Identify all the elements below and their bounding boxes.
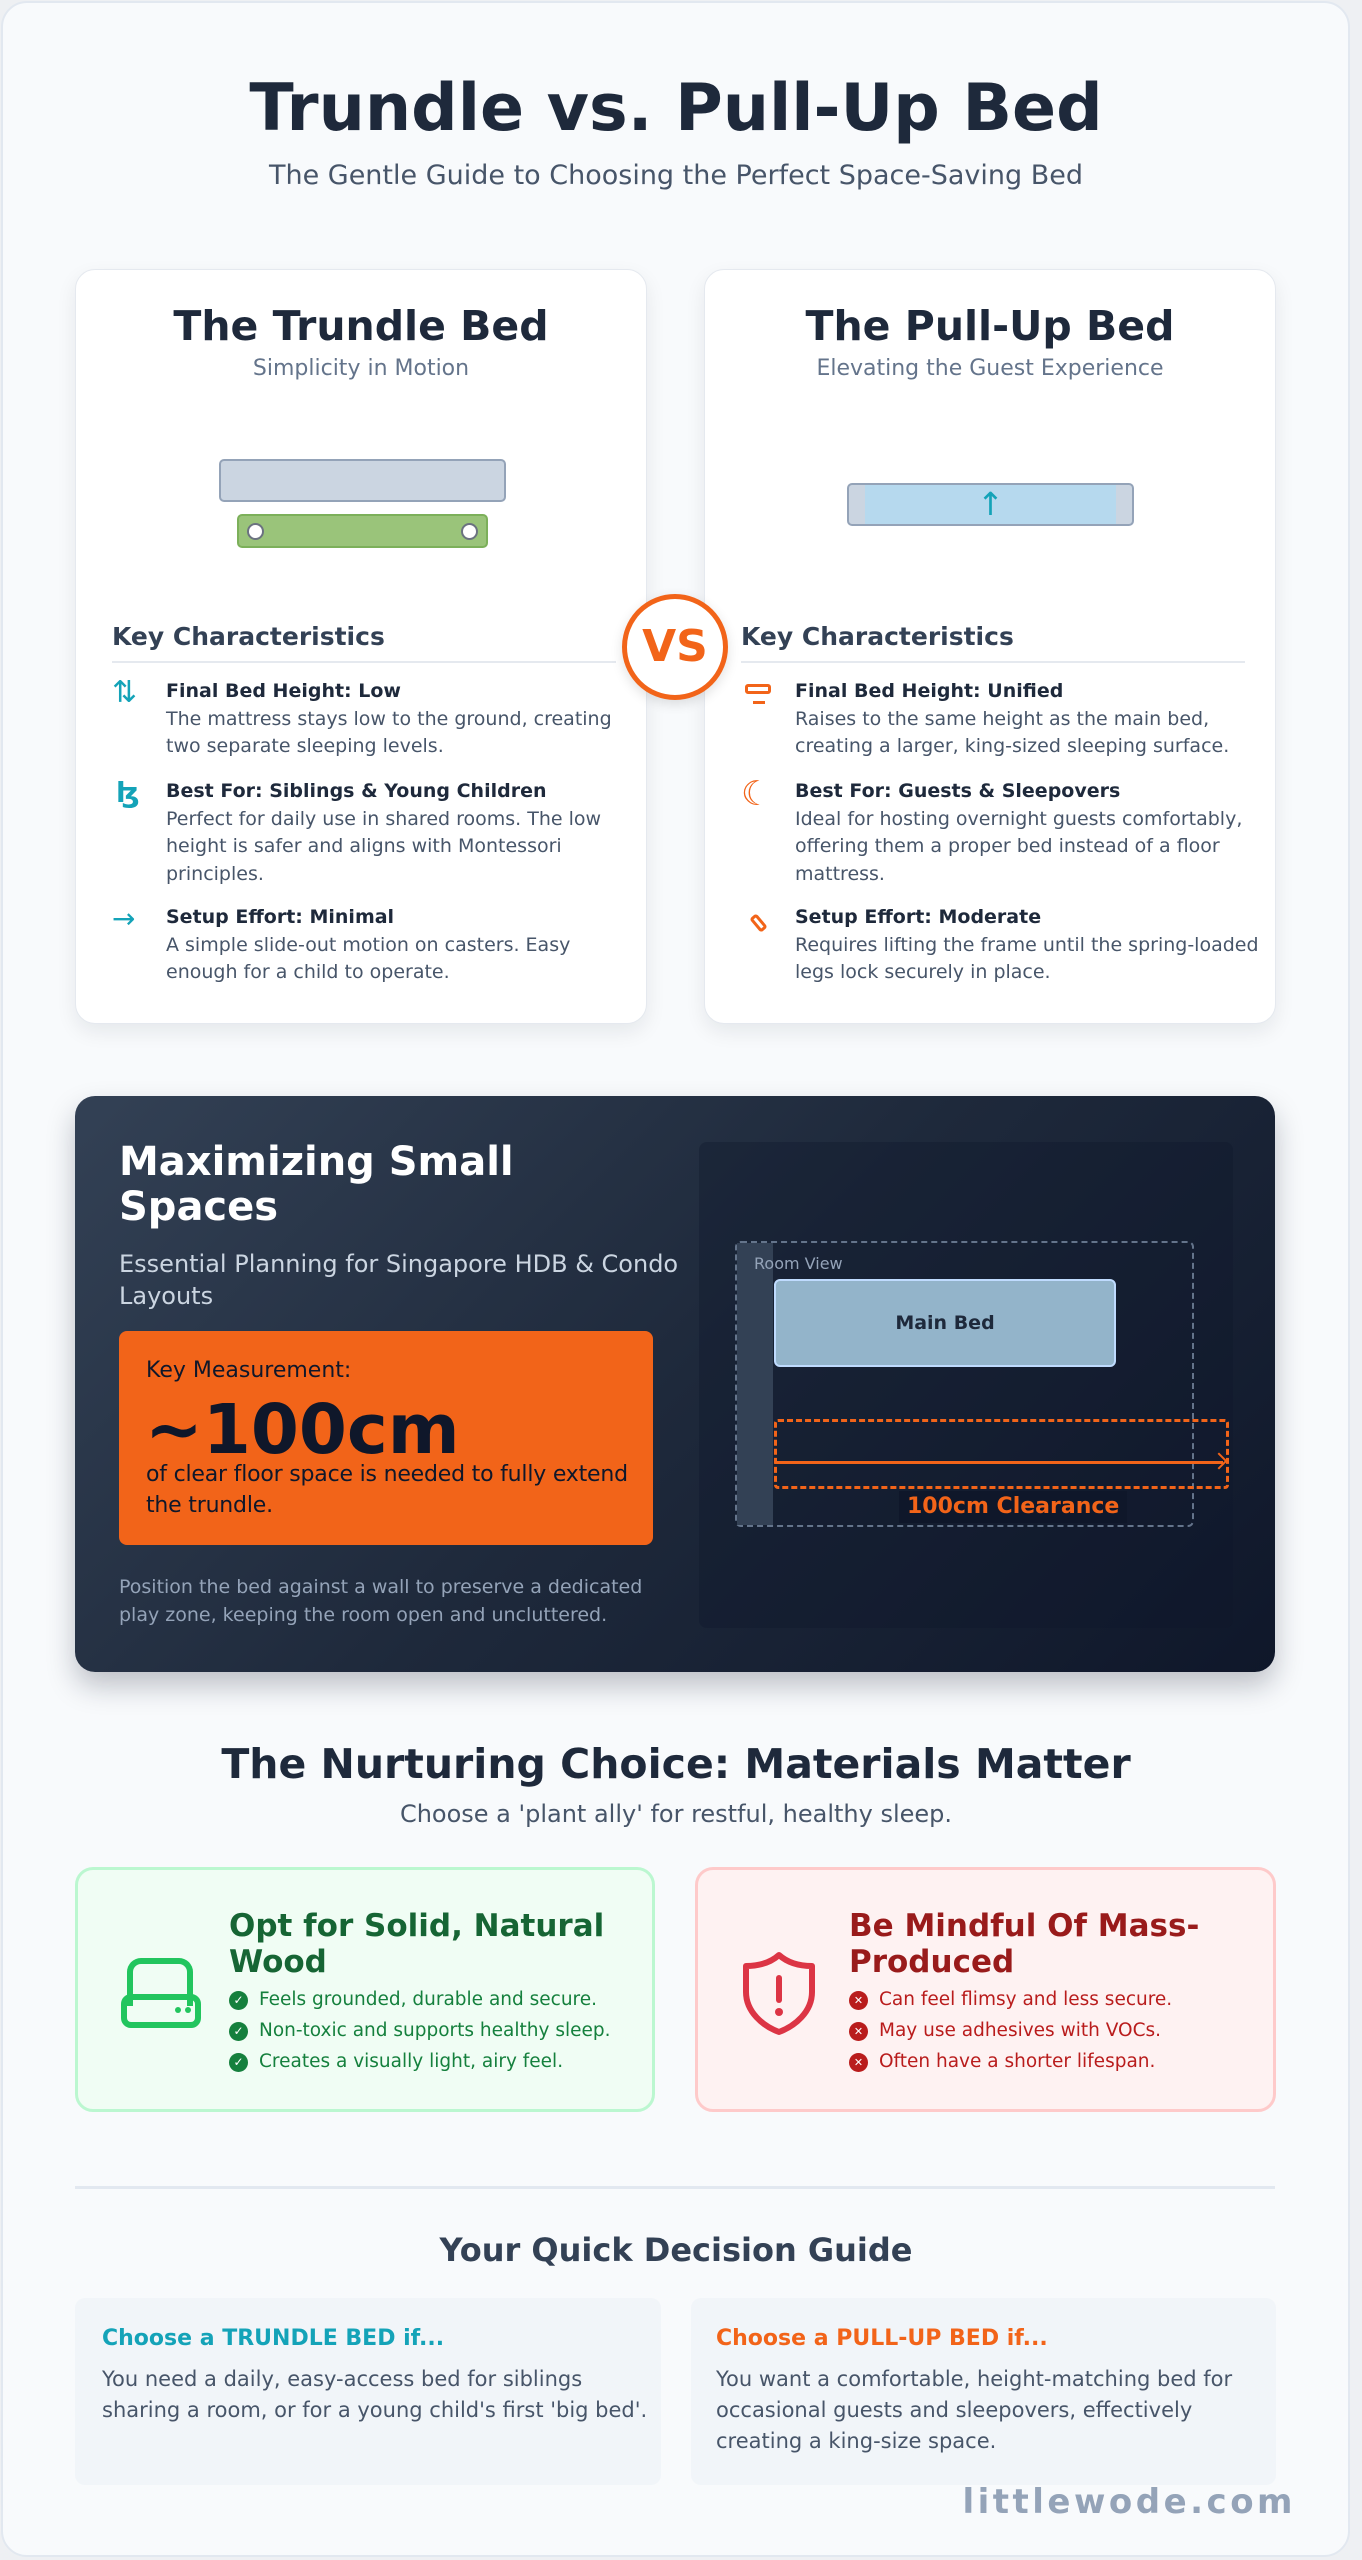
panel: trundle bed [75, 269, 647, 1024]
item: setup [750, 906, 1259, 983]
heading: Opt for Solid, Natural Wood [229, 1908, 604, 1980]
heading: Choose a TRUNDLE BED if... [102, 2326, 444, 2351]
heading: materials: The Nurturing Choice: Materials Matter [221, 1740, 1131, 1788]
callout: key measurement: ~100cm [145, 1390, 460, 1470]
panel: maximizing small spaces [75, 1096, 1275, 1672]
heading: Choose a PULL-UP BED if... [716, 2326, 1048, 2351]
list: benefits: Feels grounded, durable and secure. [259, 1989, 597, 2010]
panel: trundle bed: Setup Effort: Minimal [166, 906, 394, 928]
panel: trundle bed: Perfect for daily use in shared rooms. The low height is safer and aligns with Montessori principles. [166, 808, 601, 884]
list: drawbacks [849, 1989, 1172, 2072]
list: drawbacks: Can feel flimsy and less secure. [879, 1989, 1172, 2010]
panel: solid wood [75, 1867, 655, 2112]
panel: pull-up bed: Requires lifting the frame until the spring-loaded legs lock securely in place. [795, 934, 1259, 983]
subtitle: The Gentle Guide to Choosing the Perfect Space-Saving Bed [269, 160, 1083, 191]
icon: moon: ☾ [741, 774, 771, 814]
panel: mass-produced [695, 1867, 1276, 2112]
list: benefits [229, 1989, 610, 2072]
heading: key characteristics: Key Characteristics [112, 622, 385, 651]
panel: pull-up bed: Raises to the same height as the main bed, creating a larger, king-sized sleeping surface. [795, 708, 1229, 757]
list: benefits: ✓ [233, 1993, 244, 2007]
callout: key measurement [119, 1331, 653, 1545]
heading: Maximizing Small Spaces [119, 1139, 514, 1230]
heading: Be Mindful Of Mass-Produced [849, 1908, 1199, 1980]
list: benefits: ✓ [233, 2024, 244, 2038]
text: You want a comfortable, height-matching bed for occasional guests and sleepovers, effectively creating a king-size space. [716, 2367, 1232, 2453]
icon: level [745, 684, 771, 704]
heading: key characteristics [741, 622, 1245, 663]
subheading: Essential Planning for Singapore HDB & Condo Layouts [119, 1250, 678, 1310]
diagram: room view [699, 1142, 1233, 1628]
icon: wood block [121, 1958, 201, 2028]
panel: pull-up bed: Ideal for hosting overnight guests comfortably, offering them a proper bed instead of a floor mattress. [795, 808, 1242, 884]
panel: trundle bed: A simple slide-out motion on casters. Easy enough for a child to operate. [166, 934, 570, 983]
arrow: clearance [775, 1461, 1223, 1464]
heading: key characteristics: Key Characteristics [741, 622, 1014, 651]
wall [737, 1243, 773, 1525]
title: Trundle vs. Pull-Up Bed [249, 71, 1103, 146]
panel: pull-up bed: Setup Effort: Moderate [795, 906, 1041, 928]
subheading: materials: Choose a 'plant ally' for restful, healthy sleep. [400, 1800, 952, 1828]
list: benefits: ✓ [233, 2055, 244, 2069]
text: You need a daily, easy-access bed for siblings sharing a room, or for a young child's first 'big bed'. [102, 2367, 647, 2422]
main bed: Main Bed [895, 1312, 995, 1334]
panel: trundle bed: Final Bed Height: Low [166, 680, 401, 702]
subheading: Elevating the Guest Experience [816, 356, 1164, 381]
list: drawbacks: ✕ [854, 2025, 863, 2038]
illustration: pull-up bed: ↑ [977, 485, 1004, 523]
heading: key characteristics [112, 622, 616, 663]
watermark: littlewode.com [962, 2482, 1296, 2522]
callout: key measurement: of clear floor space is needed to fully extend the trundle. [146, 1462, 628, 1518]
icon: arrows up down: ⇅ [112, 675, 137, 710]
label: room view: Room View [754, 1254, 843, 1273]
clearance zone [774, 1419, 1229, 1489]
list: drawbacks: May use adhesives with VOCs. [879, 2020, 1161, 2041]
room outline [735, 1241, 1194, 1527]
badge: VS: VS [642, 621, 708, 672]
list: benefits: Creates a visually light, airy feel. [259, 2051, 563, 2072]
item: height [745, 680, 1229, 757]
heading: decision guide: Your Quick Decision Guide [439, 2231, 912, 2269]
illustration: pull-up bed [847, 483, 1134, 526]
icon: child: ɮ [116, 776, 140, 809]
item: height [112, 675, 612, 757]
subheading: Simplicity in Motion [253, 356, 469, 381]
panel: pull-up bed: Final Bed Height: Unified [795, 680, 1063, 702]
panel: pull-up bed: Best For: Guests & Sleepovers [795, 780, 1120, 802]
item: best for [741, 774, 1242, 884]
panel: trundle bed: Best For: Siblings & Young Children [166, 780, 546, 802]
list: benefits: Non-toxic and supports healthy sleep. [259, 2020, 610, 2041]
list: drawbacks: Often have a shorter lifespan. [879, 2051, 1155, 2072]
icon: arrow right: → [112, 902, 135, 935]
panel: pull-up bed [704, 269, 1276, 1024]
panel: choose pull-up [691, 2298, 1276, 2485]
icon: lever [749, 913, 768, 933]
badge: VS [622, 594, 728, 700]
heading: The Trundle Bed [173, 302, 549, 350]
label: clearance: 100cm Clearance [907, 1494, 1119, 1519]
icon: warning shield [743, 1952, 815, 2035]
list: drawbacks: ✕ [854, 2056, 863, 2069]
heading: The Pull-Up Bed [806, 302, 1174, 350]
main bed [774, 1279, 1116, 1367]
callout: key measurement: Key Measurement: [146, 1358, 351, 1383]
panel: choose trundle [75, 2298, 661, 2485]
panel: trundle bed: The mattress stays low to the ground, creating two separate sleeping levels. [166, 708, 612, 757]
text: tip: Position the bed against a wall to preserve a dedicated play zone, keeping the room open and uncluttered. [119, 1576, 642, 1626]
list: drawbacks: ✕ [854, 1994, 863, 2007]
item: setup [112, 902, 570, 983]
item: best for [116, 776, 601, 884]
illustration: trundle bed [219, 459, 506, 548]
